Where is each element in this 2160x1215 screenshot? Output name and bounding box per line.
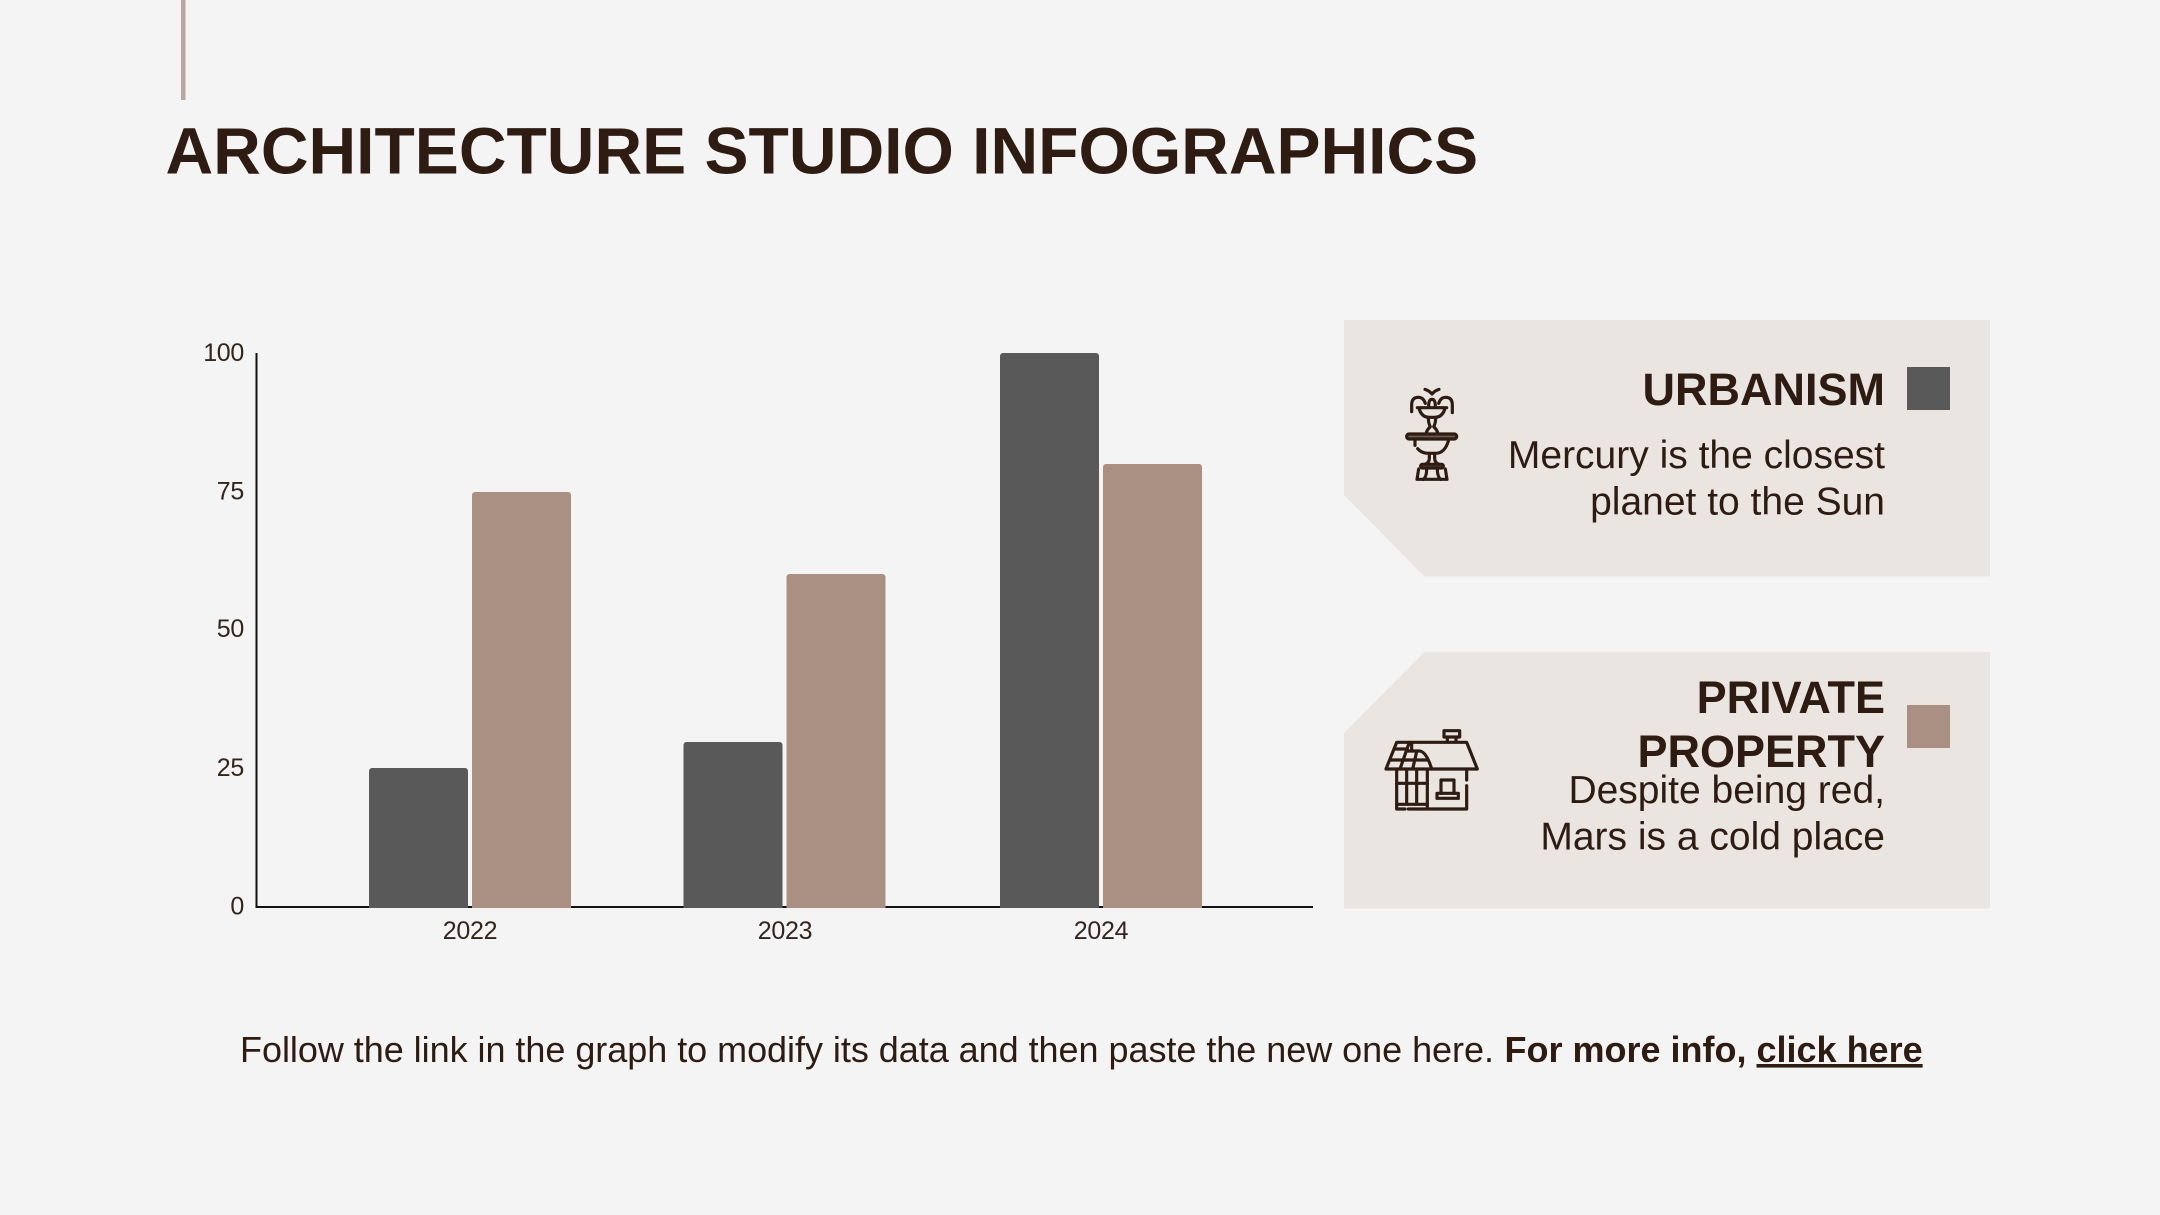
description: Despite being red, <box>1568 769 1885 812</box>
bars 2024 <box>1000 353 1202 908</box>
x axis labels: 2024 <box>1074 917 1129 945</box>
y axis labels: 50 <box>217 615 244 643</box>
y axis labels: 25 <box>217 754 244 782</box>
bars 2023 <box>684 574 886 908</box>
description <box>1508 434 1885 524</box>
legend swatch: tan <box>1907 705 1950 748</box>
heading: private property <box>1637 672 1885 777</box>
y axis labels: 75 <box>217 478 244 506</box>
y axis labels: 0 <box>230 892 244 920</box>
footer link: For more info, click here <box>1504 1029 1923 1070</box>
x axis labels <box>443 917 1129 945</box>
legend swatch: dark <box>1907 367 1950 410</box>
panel: urbanism <box>1344 320 1990 576</box>
y axis labels <box>203 339 244 920</box>
footer note: Follow the link in the graph to modify its data and then paste the new one here. <box>240 1029 1494 1070</box>
description: planet to the Sun <box>1590 480 1885 524</box>
bar chart <box>203 339 1313 945</box>
panel background <box>1344 320 1990 576</box>
y axis labels: 100 <box>203 339 244 367</box>
icon: house <box>1384 729 1479 811</box>
description: Mercury is the closest <box>1508 434 1885 477</box>
heading: private property: PROPERTY <box>1637 726 1885 777</box>
heading: private property: PRIVATE <box>1697 672 1885 723</box>
icon: fountain <box>1405 388 1458 481</box>
title: ARCHITECTURE STUDIO INFOGRAPHICS <box>166 114 1478 188</box>
description <box>1540 769 1885 858</box>
accent bar <box>181 0 186 100</box>
bars 2022 <box>369 492 571 908</box>
x axis labels: 2023 <box>758 917 812 945</box>
heading: urbanism: URBANISM <box>1642 364 1885 415</box>
x axis labels: 2022 <box>443 917 497 945</box>
panel: private property <box>1344 652 1990 908</box>
panel background <box>1344 652 1990 908</box>
description: Mars is a cold place <box>1540 816 1885 858</box>
axes <box>256 353 1313 907</box>
